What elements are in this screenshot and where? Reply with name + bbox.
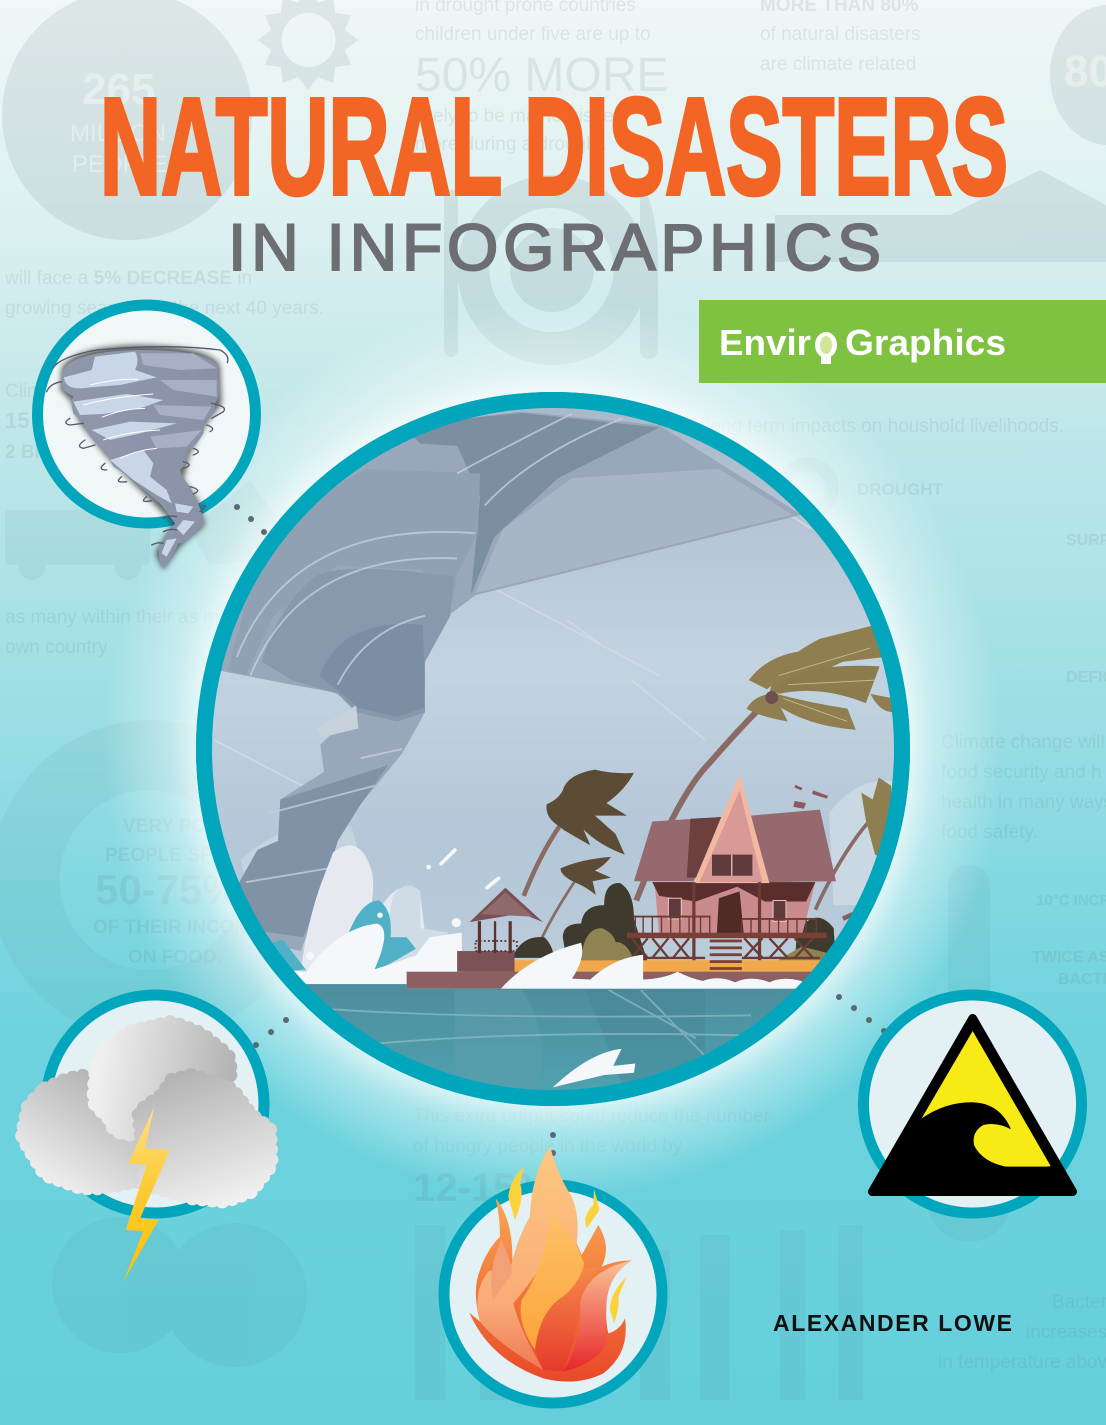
series banner: EnviroGraphics (699, 300, 1106, 383)
ghost white numbers on globe: MILLION (70, 120, 166, 147)
ghost text: Climate (5, 381, 69, 402)
icon circle: wildfire (444, 1147, 662, 1403)
funnel lower section (237, 765, 388, 937)
right palm (815, 777, 893, 910)
tornado illustration (47, 345, 228, 570)
ghost text: Climate change will (941, 732, 1105, 753)
ghost bars (415, 1225, 863, 1400)
door (717, 891, 744, 937)
gable (694, 774, 769, 883)
water reflections and streaks (319, 990, 769, 1121)
stilt house (627, 774, 836, 970)
banner wordmark right: Graphics (845, 322, 1006, 363)
ghost text: 50% MORE (415, 49, 668, 102)
right roof (751, 810, 836, 882)
ghost plane (190, 480, 300, 565)
main light flame (477, 1147, 578, 1370)
debris (793, 785, 854, 921)
teal wave curl (347, 901, 416, 974)
bright centre flame (521, 1213, 584, 1350)
funnel swirl lines (237, 414, 622, 882)
foam along shore (501, 943, 813, 989)
funnel core (319, 624, 424, 717)
funnel light tabs (317, 705, 358, 738)
ghost text: This extra output could reduce the number (413, 1106, 771, 1127)
ghost text: long term impacts on houshold livelihoods. (706, 416, 1064, 437)
left inner lick (491, 1240, 512, 1300)
left cloud (22, 1075, 138, 1188)
posts (692, 882, 761, 960)
distant pale cloud shapes (829, 781, 893, 905)
tornado body (62, 350, 219, 568)
bushes (514, 883, 834, 960)
ghost text: as many within their as many (5, 607, 250, 628)
beach hut (470, 888, 543, 953)
ghost text: more during a drought. (415, 134, 607, 155)
faded background infographic: lower shapes (0, 464, 1011, 1400)
funnel dark top band (402, 413, 659, 595)
wave (870, 1102, 1057, 1192)
ghost text: ON FOOD. (128, 947, 222, 968)
flame illustration (469, 1147, 632, 1382)
right cloud (138, 1075, 272, 1202)
sea (200, 984, 920, 1121)
ghost text: children under five are up to (415, 24, 651, 45)
author name: ALEXANDER LOWE (773, 1310, 1012, 1336)
ghost text: food security and h (941, 762, 1102, 783)
ghost plate and cutlery (444, 175, 658, 365)
ghost drop (1050, 5, 1106, 145)
ghost white numbers on globe: PEOPLE (72, 151, 168, 178)
icon: light bulb (815, 332, 837, 364)
hut platform (457, 951, 515, 972)
funnel inner band (262, 569, 453, 721)
ghost text: likely to be malnourished (415, 106, 624, 127)
ghost text: own country (5, 637, 108, 658)
ghost text: 50-75% (95, 866, 240, 913)
ghost text: VERY POOR (123, 816, 235, 837)
ghost text: DROUGHT (857, 480, 944, 499)
dark palm (524, 770, 634, 896)
ghost donut ring (0, 720, 311, 1040)
scene artwork (212, 408, 894, 1090)
orange beach strip (477, 960, 830, 973)
left roof (634, 817, 721, 881)
ghost text: 2 BILLION ANTS (5, 442, 153, 463)
spray cloud behind waves (301, 845, 462, 969)
banner wordmark left: Envir (719, 322, 811, 363)
ghost globe (2, 0, 252, 240)
icon circle: tsunami warning (864, 995, 1082, 1213)
ghost house (775, 170, 1106, 262)
ghost text: 15 (5, 408, 29, 433)
subtitle: IN INFOGRAPHICS (228, 210, 881, 284)
right petal (563, 1261, 632, 1372)
main circle ring (204, 400, 902, 1098)
yellow flame licks (508, 1166, 627, 1323)
ghost text: OF THEIR INCOME (93, 917, 263, 938)
house walls (655, 882, 815, 937)
ghost text: of hungry people in the world by (413, 1136, 683, 1157)
sky (200, 400, 920, 988)
gable window (712, 855, 752, 876)
ghost drought sun (784, 464, 832, 512)
ghost bus (5, 510, 150, 580)
tornado drop shadow (60, 345, 222, 570)
tornado light patches (64, 352, 195, 557)
deck cross braces (629, 938, 820, 958)
red lower centre (535, 1267, 602, 1372)
ghost text: PEOPLE SPEND (105, 845, 253, 866)
lightning bolt (123, 1107, 170, 1282)
ghost text: are climate related (760, 54, 916, 75)
storm cloud illustration (22, 1022, 272, 1282)
funnel lit band (476, 469, 792, 593)
wind streaks (214, 516, 811, 786)
tornado white streaks (83, 379, 160, 458)
faded background infographic: upper shapes (2, 0, 1106, 365)
dotted connectors (234, 504, 887, 1156)
railings (634, 917, 818, 935)
top cloud (93, 1022, 232, 1135)
flame silhouette (469, 1147, 632, 1382)
icon circle: storm cloud (22, 995, 272, 1282)
ghost text: of natural disasters (760, 24, 921, 45)
large palm (636, 625, 893, 901)
main circle: tornado over island (200, 400, 920, 1121)
white foam left (283, 923, 462, 984)
ghost thermometer (927, 865, 1011, 1242)
tornado curls and rim (47, 347, 228, 545)
white wave crests on sea (553, 1049, 635, 1087)
ghost white numbers on globe (70, 47, 1106, 178)
icon circle: tornado (38, 305, 256, 570)
deck (627, 933, 827, 938)
ghost sun (258, 0, 358, 90)
ghost text: food safety. (941, 822, 1038, 843)
side windows (668, 898, 786, 921)
land (407, 972, 820, 989)
ghost apple (52, 1217, 307, 1367)
tornado mid tone patches (140, 353, 217, 448)
eaves shadow (652, 882, 815, 901)
ghost white numbers on globe: 265 (82, 65, 155, 114)
tsunami warning triangle (870, 1018, 1073, 1192)
ghost text: growing seasons in the next 40 years. (5, 298, 324, 319)
tornado funnel (209, 411, 802, 951)
ghost text: 12-15% (413, 1166, 551, 1210)
stairs (710, 940, 742, 970)
small dark palm (542, 857, 611, 937)
ghost text: will face a 5% DECREASE in (4, 268, 252, 289)
white glow behind main circle (103, 299, 1003, 1199)
funnel left band (252, 470, 480, 662)
